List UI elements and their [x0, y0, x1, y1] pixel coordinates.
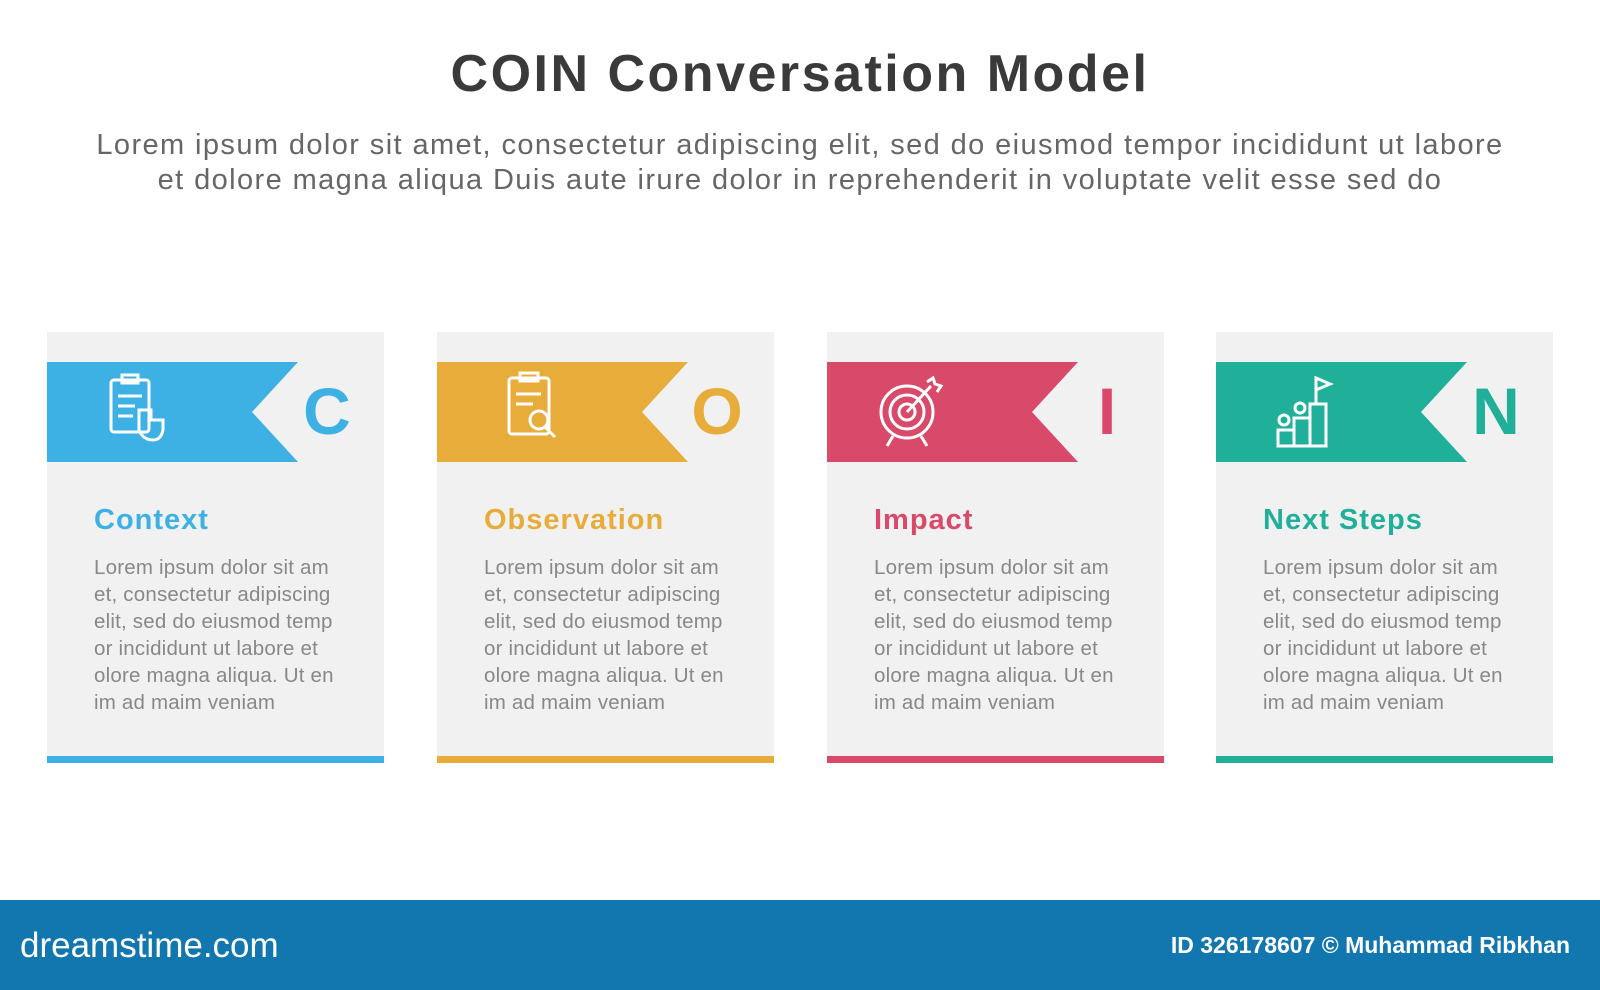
- footer bar: [0, 900, 1600, 990]
- footer logo: dreamstime.com: [20, 926, 279, 965]
- heading: Next Steps: [1263, 504, 1423, 536]
- panel: observation: [437, 332, 774, 763]
- heading: Impact: [874, 504, 973, 536]
- ribbon: observation: [437, 362, 688, 462]
- subtitle: [96, 129, 1504, 196]
- title: COIN Conversation Model: [451, 45, 1149, 103]
- heading: Context: [94, 504, 209, 536]
- panel: next steps: [1216, 332, 1553, 763]
- panel: context: [47, 332, 384, 763]
- body text: Lorem ipsum dolor sit am et, consectetur adipiscing elit, sed do eiusmod temp or incididunt ut labore et olore magna aliqua. Ut en im ad maim veniam: [1263, 556, 1503, 714]
- heading: Observation: [484, 504, 664, 536]
- letter C: C: [303, 374, 351, 448]
- body text: Lorem ipsum dolor sit am et, consectetur adipiscing elit, sed do eiusmod temp or incididunt ut labore et olore magna aliqua. Ut en im ad maim veniam: [874, 556, 1114, 714]
- letter O: O: [691, 374, 743, 448]
- ribbon: impact: [827, 362, 1078, 462]
- footer credit: ID 326178607 © Muhammad Ribkhan: [1171, 932, 1570, 958]
- ribbon: next steps: [1216, 362, 1467, 462]
- body text: Lorem ipsum dolor sit am et, consectetur adipiscing elit, sed do eiusmod temp or incididunt ut labore et olore magna aliqua. Ut en im ad maim veniam: [484, 556, 724, 714]
- ribbon: context: [47, 362, 298, 462]
- letter N: N: [1472, 374, 1520, 448]
- subtitle: Lorem ipsum dolor sit amet, consectetur adipiscing elit, sed do eiusmod tempor incididunt ut labore: [96, 129, 1504, 161]
- panel: impact: [827, 332, 1164, 763]
- body text: Lorem ipsum dolor sit am et, consectetur adipiscing elit, sed do eiusmod temp or incididunt ut labore et olore magna aliqua. Ut en im ad maim veniam: [94, 556, 334, 714]
- subtitle: et dolore magna aliqua Duis aute irure dolor in reprehenderit in voluptate velit esse sed do: [158, 164, 1442, 196]
- letter I: I: [1098, 374, 1116, 448]
